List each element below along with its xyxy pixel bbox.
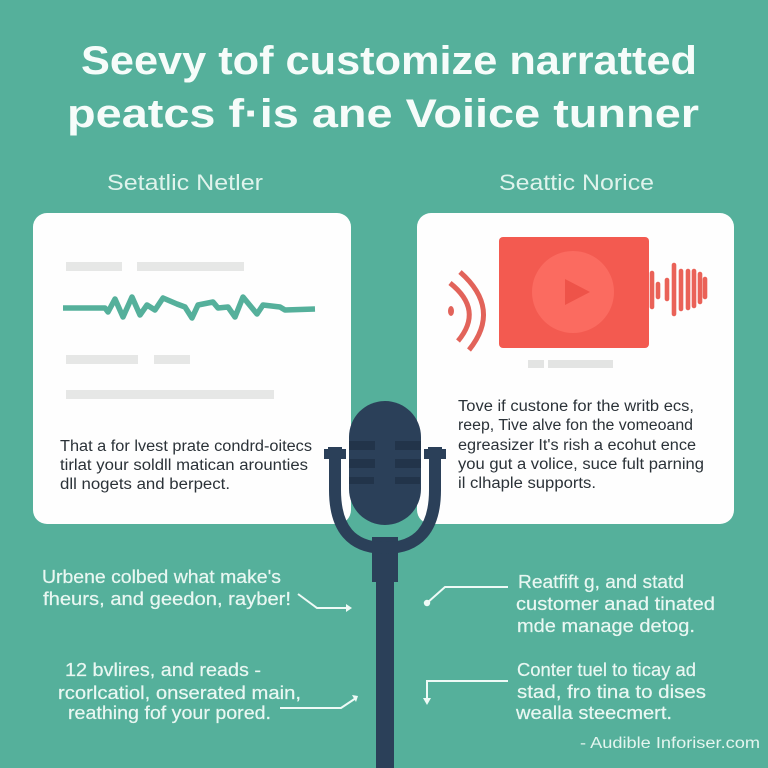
placeholder bars top <box>66 262 244 271</box>
right card text: il clhaple supports. <box>458 475 596 492</box>
callout: bottom left: rcorlcatiol, onserated main, <box>58 683 301 703</box>
callout: bottom right: stad, fro tina to dises <box>517 682 706 702</box>
left card text <box>60 438 312 493</box>
callout: top left <box>42 567 352 612</box>
title: Seevy tof customize narratted <box>81 39 697 83</box>
right card text: reep, Tive alve fon the vomeoand <box>458 417 693 434</box>
title: peatcs f·is ane Voiice tunner <box>67 92 699 136</box>
arrow <box>427 681 508 699</box>
left heading: Setatlic Netler <box>107 170 263 195</box>
callout: top right: customer anad tinated <box>516 594 715 614</box>
panel: left card <box>33 213 351 524</box>
callout: top right: Reatfift g, and statd <box>518 572 684 592</box>
waveform <box>63 297 315 318</box>
arrow <box>427 587 508 603</box>
right card text <box>458 398 704 492</box>
right heading: Seattic Norice <box>499 170 654 195</box>
left card text: That a for lvest prate condrd-oitecs <box>60 438 312 455</box>
icon: red audio player <box>499 237 705 348</box>
right card text: you gut a volice, suce fult parning <box>458 456 704 473</box>
left card text: tirlat your soldll matican arounties <box>60 457 308 474</box>
arrow <box>280 698 356 708</box>
sound bars <box>652 265 705 314</box>
callout: top left: Urbene colbed what make's <box>42 567 281 587</box>
callout: bottom right: Conter tuel to ticay ad <box>517 660 696 680</box>
arrow <box>298 594 348 608</box>
icon: sound waves <box>448 272 484 350</box>
source credit: - Audible Inforiser.com <box>580 735 760 752</box>
caption bar <box>528 360 613 368</box>
callout: top right <box>424 572 715 636</box>
mic cradle <box>335 452 435 548</box>
mic head <box>349 401 421 525</box>
mic stand <box>372 537 398 768</box>
placeholder bars bottom <box>66 355 274 399</box>
title <box>67 39 699 136</box>
callout: bottom left: 12 bvlires, and reads - <box>65 660 261 680</box>
right card text: Tove if custone for the writb ecs, <box>458 398 694 415</box>
callout: top right: mde manage detog. <box>517 616 695 636</box>
icon: microphone <box>324 401 446 768</box>
callout: bottom right: wealla steecmert. <box>515 703 672 723</box>
panel: right card <box>417 213 734 524</box>
callout: bottom left <box>58 660 358 723</box>
right card text: egreasizer It's rish a ecohut ence <box>458 437 696 454</box>
callout: top left: fheurs, and geedon, rayber! <box>43 589 291 609</box>
left card text: dll nogets and berpect. <box>60 476 230 493</box>
callout: bottom right <box>423 660 706 723</box>
callout: bottom left: reathing fof your pored. <box>68 703 271 723</box>
